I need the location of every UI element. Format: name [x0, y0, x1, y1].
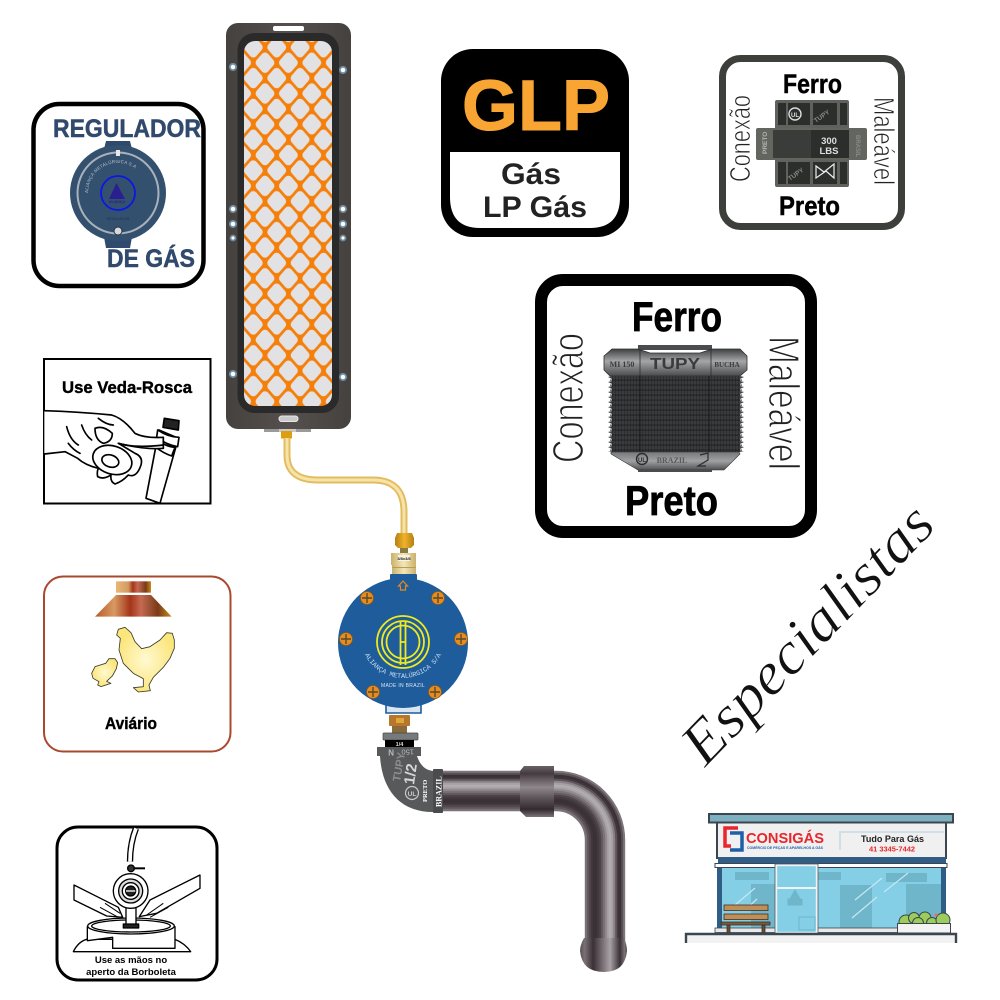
elbow fitting — [377, 747, 444, 813]
icon: cross fitting: PRETO — [762, 132, 769, 154]
made in brazil: MADE IN BRAZIL — [381, 683, 425, 689]
planter — [898, 912, 950, 933]
icon: threaded bushing: UL — [638, 458, 646, 464]
label: Maleável: Maleável — [867, 97, 899, 185]
icon: cross fitting: TUPY — [787, 167, 806, 183]
label: LP Gás: LP Gás — [483, 191, 587, 224]
panel: GLP — [441, 49, 629, 237]
brand name: CONSIGÁS — [746, 830, 824, 847]
elbow fitting: TUPY — [391, 751, 408, 783]
icon: cross fitting: UL — [791, 113, 799, 119]
valve below regulator: 1/4 — [396, 742, 404, 748]
label: Aviário: Aviário — [105, 714, 157, 733]
window glass — [717, 867, 946, 933]
elbow fitting: BRAZIL — [434, 776, 444, 807]
heading: Preto: Preto — [625, 477, 718, 524]
icon: hands tightening regulator on cylinder — [73, 828, 200, 952]
pipe collar — [520, 766, 554, 817]
icon: hand with sealing tape — [44, 411, 179, 503]
heading: Use Veda-Rosca: Use Veda-Rosca — [62, 378, 193, 397]
slogan: Tudo Para Gás — [861, 834, 924, 844]
icon: threaded bushing: TUPY — [650, 356, 700, 373]
icon: regulator body: ALIANÇA — [109, 200, 125, 204]
heater: infrared burner — [226, 23, 351, 432]
label: Maleável: Maleável — [759, 336, 808, 470]
elbow fitting: UL — [408, 791, 416, 798]
label: Conexão: Conexão — [544, 333, 593, 463]
icon: hen and chick — [92, 627, 174, 692]
logo: yellow rings — [377, 616, 429, 668]
panel: regulator — [31, 102, 206, 288]
label: Conexão: Conexão — [725, 95, 757, 182]
logo mark — [725, 828, 738, 846]
elbow fitting: N — [388, 748, 394, 756]
heading: GLP: GLP — [462, 67, 610, 146]
door — [775, 864, 818, 934]
icon: heat lamp — [95, 581, 172, 617]
icon: cross fitting: 300 — [821, 136, 837, 147]
elbow fitting: 1/2 — [401, 763, 421, 786]
label: instruction: aperto da Borboleta — [86, 967, 177, 978]
heading: Ferro: Ferro — [632, 293, 722, 340]
panel: use veda-rosca — [44, 359, 210, 504]
bolts — [340, 592, 468, 698]
pavement — [686, 934, 956, 943]
icon: threaded bushing — [604, 345, 747, 472]
heading: Preto: Preto — [779, 191, 840, 221]
store front — [686, 814, 956, 943]
pipe: long bend with concentric shading — [442, 772, 624, 945]
regulator: blue body — [338, 574, 468, 714]
icon: cross fitting: LBS — [820, 146, 838, 157]
icon: cross fitting: TUPY — [813, 109, 832, 125]
heading: DE GÁS: DE GÁS — [107, 244, 195, 273]
brand tagline: COMÉRCIO DE PEÇAS E APARELHOS A GÁS — [747, 845, 823, 850]
panel: small ferro maleável tee — [722, 58, 902, 226]
icon: regulator body — [70, 141, 166, 248]
gas hose — [281, 431, 404, 533]
panel: large ferro maleável bushing — [541, 280, 811, 532]
panel: aviário — [44, 576, 230, 752]
phone: 41 3345-7442 — [869, 844, 915, 854]
icon: regulator body: ALIANÇA METALÚRGICA S.A — [85, 160, 136, 193]
elbow fitting: 150 — [401, 748, 414, 756]
heading: REGULADOR: REGULADOR — [53, 115, 201, 143]
valve below regulator — [383, 715, 418, 748]
elbow fitting: PRETO — [422, 780, 429, 802]
burner mesh — [244, 41, 332, 406]
icon: regulator body: REGULADOR — [107, 217, 130, 221]
sign board — [717, 822, 946, 863]
brand text: ALIANÇA METALÚRGICA S/A — [364, 654, 442, 678]
icon: cross fitting: BRASIL — [854, 135, 860, 158]
shelf line — [715, 864, 947, 868]
handwritten: Especialistas: Especialistas — [666, 490, 947, 778]
regulator connector top: 3/8x3/8 — [397, 556, 411, 561]
heading: Ferro: Ferro — [783, 69, 842, 99]
bench — [721, 905, 770, 933]
icon: cross fitting — [756, 100, 867, 187]
icon: threaded bushing: BUCHA — [714, 361, 740, 369]
label: instruction — [86, 955, 177, 978]
screws — [230, 64, 346, 380]
pipe end cap — [580, 938, 627, 972]
label: Gás: Gás — [501, 158, 561, 191]
icon: threaded bushing: MI 150 — [610, 360, 634, 369]
panel: aperto da borboleta — [57, 827, 217, 980]
icon: threaded bushing: BRAZIL — [657, 456, 687, 465]
roof — [709, 814, 953, 822]
regulator connector top — [391, 533, 416, 575]
label: instruction: Use as mãos no — [95, 955, 167, 966]
icon: arrow — [398, 581, 408, 590]
